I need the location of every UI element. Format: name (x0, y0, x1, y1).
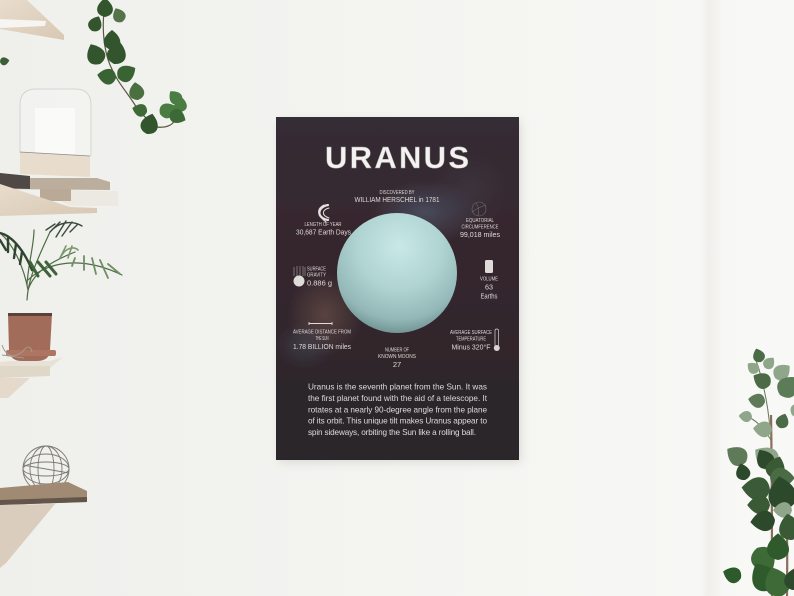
discovered by: DISCOVERED BY (380, 190, 415, 196)
description paragraph: spin sideways, orbiting the Sun like a rolling ball. (308, 428, 476, 437)
lower shelf with book (0, 357, 63, 398)
description paragraph: the first planet found with the aid of a telescope. It (308, 394, 488, 403)
stat: equatorial circumference: 99,018 miles (460, 230, 500, 239)
stat: surface temperature (450, 330, 493, 352)
stat: surface gravity: 0.886 g (307, 278, 332, 288)
terracotta pot (2, 313, 56, 361)
panel: poster (275, 117, 519, 460)
glass jar with candle (20, 89, 91, 177)
stat: known moons: 27 (393, 360, 401, 369)
stat: volume: 63 (485, 282, 493, 292)
stat: volume: VOLUME (480, 276, 499, 282)
stat: surface gravity (307, 266, 332, 288)
icon: volume cylinder (485, 260, 493, 273)
icon: distance ruler (309, 322, 332, 325)
stat: length of year: LENGTH OF YEAR (304, 222, 342, 228)
stat: length of year: 30,687 Earth Days (296, 228, 351, 236)
stat: known moons: NUMBER OF (385, 348, 409, 354)
middle wooden shelf (0, 184, 97, 216)
icon: orbit crescent (319, 205, 329, 222)
stat: known moons: KNOWN MOONS (378, 354, 417, 360)
stat: known moons (378, 348, 417, 369)
planet Uranus (337, 213, 457, 333)
stat: surface temperature: TEMPERATURE (456, 336, 487, 342)
stat: volume: Earths (480, 292, 498, 300)
stat: equatorial circumference: EQUATORIAL (466, 218, 494, 224)
description paragraph: of its orbit. This unique tilt makes Uranus appear to (308, 416, 487, 426)
hanging ivy (83, 0, 188, 136)
stat: average distance: 1.78 BILLION miles (293, 342, 351, 351)
stat: volume (480, 276, 499, 300)
poster shadow (279, 121, 521, 462)
description paragraph: Uranus is the seventh planet from the Sun. It was (308, 382, 487, 392)
icon: circumference globe (472, 202, 486, 216)
fern plant (0, 221, 122, 300)
top wooden shelf (0, 0, 64, 40)
curtain (697, 0, 727, 596)
discovered by: WILLIAM HERSCHEL in 1781 (354, 195, 440, 204)
stray leaf at left edge (0, 56, 10, 66)
stat: length of year (296, 222, 351, 236)
stat: average distance: AVERAGE DISTANCE FROM (293, 330, 351, 336)
stat: average distance: THE SUN (316, 336, 329, 342)
discovered by (354, 190, 440, 204)
stat: surface gravity: SURFACE (307, 266, 327, 272)
icon: thermometer (494, 329, 500, 351)
stat: equatorial circumference (460, 218, 500, 239)
title: URANUS (325, 140, 469, 175)
icon: gravity apple (294, 266, 305, 286)
stat: average distance (293, 330, 351, 351)
bottom shelf bracket (0, 504, 55, 568)
stat: surface gravity: GRAVITY (307, 272, 327, 278)
description paragraph (308, 382, 488, 437)
stacked books (0, 173, 118, 206)
stat: surface temperature: AVERAGE SURFACE (450, 330, 493, 336)
brown book on bottom shelf (0, 482, 87, 505)
right plant (720, 347, 794, 596)
stat: surface temperature: Minus 320°F (452, 342, 491, 352)
wire ball (23, 446, 69, 492)
stat: equatorial circumference: CIRCUMFERENCE (462, 224, 499, 230)
description paragraph: rotates at a nearly 90-degree angle from the plane (308, 406, 487, 414)
